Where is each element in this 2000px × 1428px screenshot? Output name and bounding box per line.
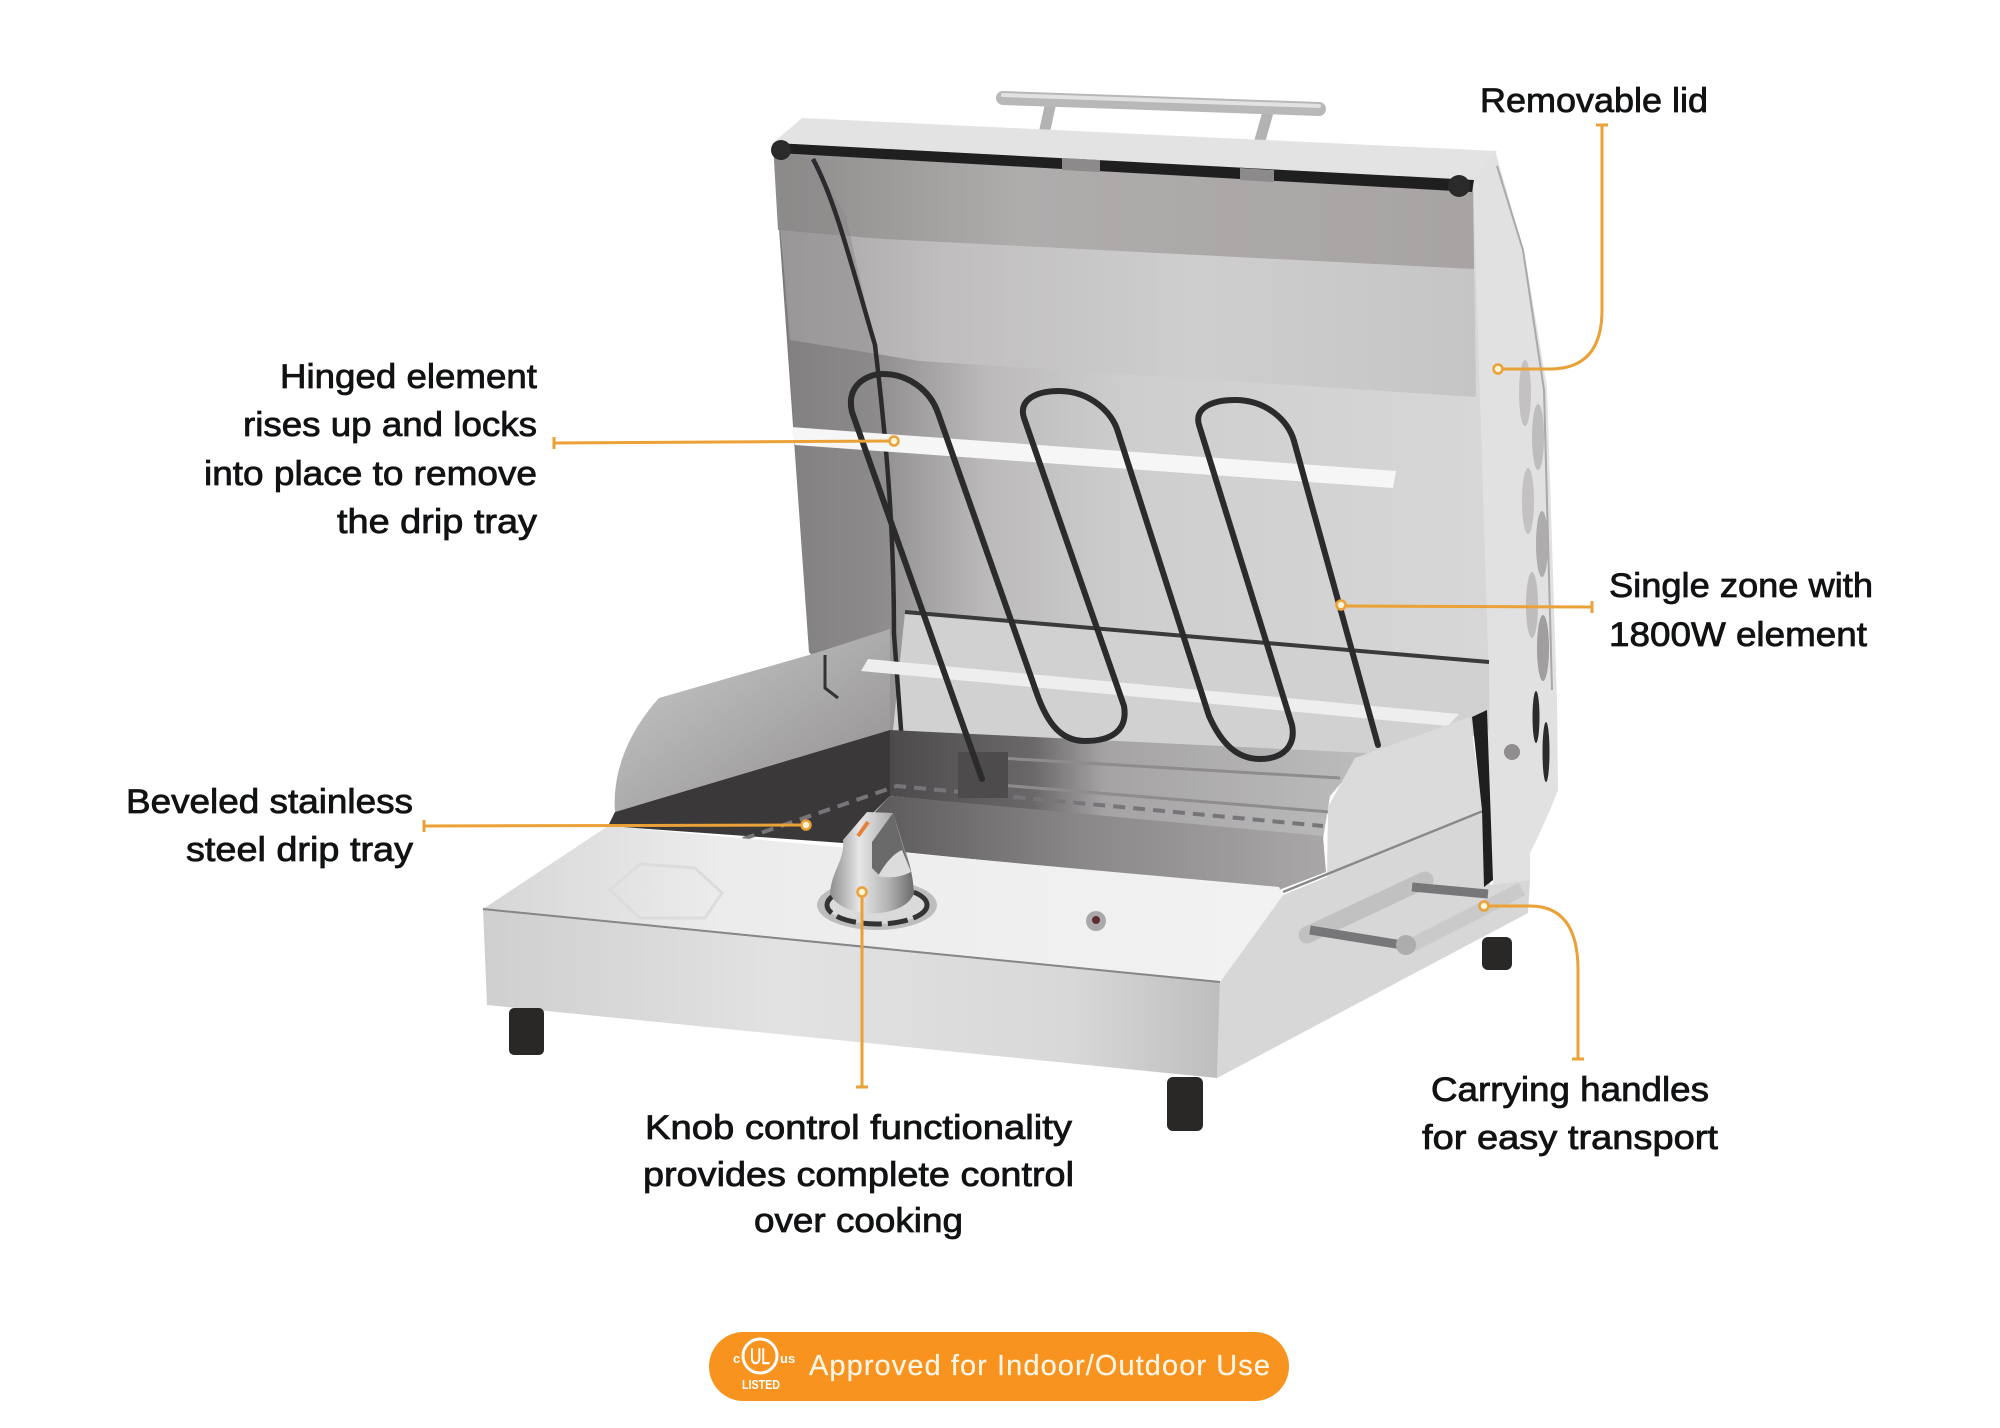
tray interior (608, 730, 890, 843)
callout: carrying handles: for easy transport (1422, 1119, 1719, 1157)
callout: hinged element: the drip tray (337, 503, 537, 541)
side carrying handle (1307, 880, 1522, 955)
embossed logo (610, 864, 722, 918)
callout: hinged element (204, 358, 898, 541)
callout: beveled drip tray: steel drip tray (186, 831, 413, 869)
drip tray dashed seam (743, 786, 1323, 839)
wire connector (825, 655, 838, 698)
base front panel (483, 909, 1220, 1078)
white support bars (791, 427, 1459, 726)
base control panel (483, 826, 1283, 982)
callout: removable lid (1480, 82, 1708, 374)
element bracket (958, 752, 1008, 798)
callout: beveled drip tray: Beveled stainless (126, 783, 413, 821)
hinge black strip (1472, 710, 1493, 887)
lid top edge (773, 118, 1497, 180)
indicator light (1086, 911, 1106, 931)
tray front wall (843, 796, 1326, 890)
callout: hinged element: Hinged element (280, 358, 538, 396)
base side panel (1217, 813, 1530, 1078)
tray back wall ribs (1000, 758, 1340, 812)
icon: UL listed mark (733, 1339, 795, 1392)
callout: knob control: provides complete control (643, 1156, 1074, 1194)
icon: UL listed mark: c (733, 1351, 740, 1366)
icon: UL listed mark: UL (750, 1344, 770, 1369)
lid black seal and screws (771, 140, 1474, 197)
callout: knob control (643, 888, 1074, 1240)
heating element coil (851, 374, 1378, 779)
callout: single zone element: 1800W element (1609, 616, 1868, 654)
callout: knob control: over cooking (754, 1202, 963, 1240)
product illustration: electric grill (483, 95, 1558, 1131)
callout: knob control: Knob control functionality (645, 1109, 1072, 1147)
power wire (813, 159, 904, 770)
badge: approved for indoor/outdoor use: Approved for Indoor/Outdoor Use (809, 1350, 1270, 1382)
callout: carrying handles: Carrying handles (1431, 1071, 1709, 1109)
callout: hinged element: into place to remove (204, 455, 537, 493)
control knob (817, 812, 937, 930)
badge: approved for indoor/outdoor use (709, 1332, 1289, 1401)
lid handle (1003, 95, 1319, 144)
icon: UL listed mark: us (780, 1351, 795, 1366)
left tray wing (615, 629, 890, 812)
icon: UL listed mark: LISTED (742, 1377, 780, 1392)
callout: removable lid: Removable lid (1480, 82, 1708, 120)
callout: single zone element: Single zone with (1609, 567, 1873, 605)
lid inner panel (773, 143, 1490, 765)
callout: beveled drip tray (126, 783, 810, 869)
callout: single zone element (1336, 567, 1873, 654)
callout: carrying handles (1422, 902, 1719, 1157)
lid side panel (1473, 150, 1558, 887)
feet (509, 937, 1512, 1131)
right tray wing (1327, 717, 1483, 880)
tray back wall (890, 730, 1367, 839)
callout: hinged element: rises up and locks (243, 406, 537, 444)
